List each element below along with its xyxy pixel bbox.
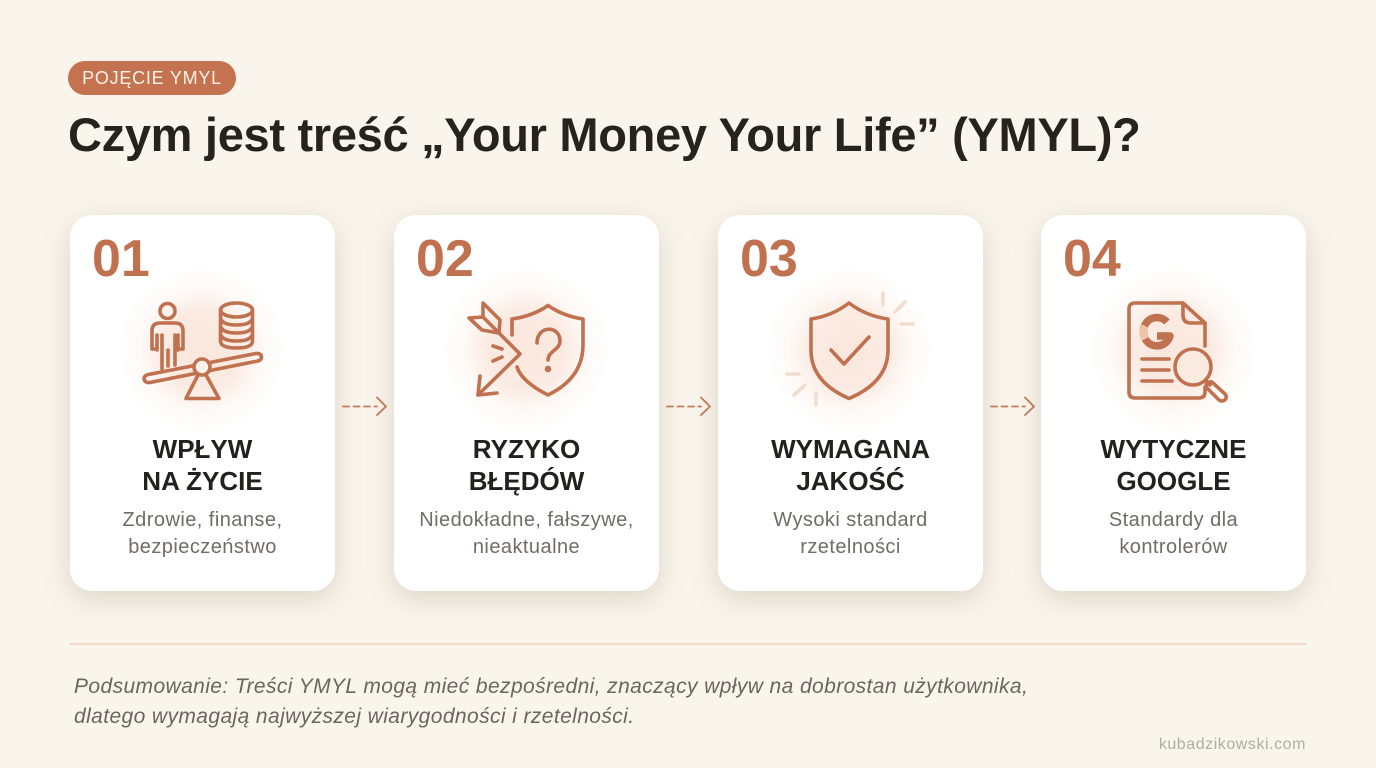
- card description: [123, 509, 282, 558]
- card heading: [469, 434, 584, 496]
- card description: Niedokładne, fałszywe,: [419, 509, 634, 531]
- icon: person and coins on a seesaw: [142, 301, 264, 400]
- badge: POJĘCIE YMYL: [68, 61, 236, 95]
- badge: POJĘCIE YMYL: POJĘCIE YMYL: [82, 68, 222, 88]
- arrow 1 to 2: [342, 396, 387, 416]
- arrow 3 to 4: [990, 396, 1035, 416]
- card heading: BŁĘDÓW: [469, 466, 584, 496]
- title: Czym jest treść „Your Money Your Life” (YMYL)?: [68, 108, 1141, 161]
- card heading: WYMAGANA: [771, 434, 930, 464]
- card heading: GOOGLE: [1116, 466, 1231, 496]
- card heading: [142, 434, 263, 496]
- number 03: 03: [740, 230, 798, 288]
- footer credit: kubadzikowski.com: [1159, 736, 1306, 753]
- panel: card 03: [718, 215, 983, 591]
- summary text: dlatego wymagają najwyższej wiarygodności i rzetelności.: [74, 705, 634, 728]
- card description: Wysoki standard: [773, 509, 928, 531]
- summary text: [74, 675, 1028, 728]
- card description: [419, 509, 634, 558]
- card description: nieaktualne: [473, 536, 580, 558]
- card description: kontrolerów: [1119, 536, 1228, 558]
- card description: Standardy dla: [1109, 509, 1238, 531]
- card description: [773, 509, 928, 558]
- icon: arrow bouncing off shield with question mark: [467, 301, 585, 397]
- panel: card 01: [70, 215, 335, 591]
- card heading: NA ŻYCIE: [142, 466, 263, 496]
- icon glow 03: [765, 265, 935, 435]
- panel: card 02: [394, 215, 659, 591]
- card description: rzetelności: [800, 536, 901, 558]
- card heading: WYTYCZNE: [1101, 434, 1246, 464]
- arrow 2 to 3: [666, 396, 711, 416]
- icon glow 01: [117, 265, 287, 435]
- card heading: WPŁYW: [153, 434, 252, 464]
- number 01: 01: [92, 230, 150, 288]
- card heading: [1100, 434, 1246, 496]
- card heading: RYZYKO: [473, 434, 580, 464]
- panel: card 04: [1041, 215, 1306, 591]
- card description: [1109, 509, 1238, 558]
- card description: bezpieczeństwo: [128, 536, 277, 558]
- number 04: 04: [1063, 230, 1121, 288]
- icon glow 04: [1088, 265, 1258, 435]
- card description: Zdrowie, finanse,: [123, 509, 282, 531]
- card heading: [771, 434, 930, 496]
- icon: document with G and magnifier: [1127, 301, 1228, 403]
- icon glow 02: [441, 265, 611, 435]
- icon: shield with check mark: [785, 291, 915, 407]
- number 02: 02: [416, 230, 474, 288]
- card heading: JAKOŚĆ: [796, 466, 905, 496]
- summary text: Podsumowanie: Treści YMYL mogą mieć bezpośredni, znaczący wpływ na dobrostan użytkownika,: [74, 675, 1028, 698]
